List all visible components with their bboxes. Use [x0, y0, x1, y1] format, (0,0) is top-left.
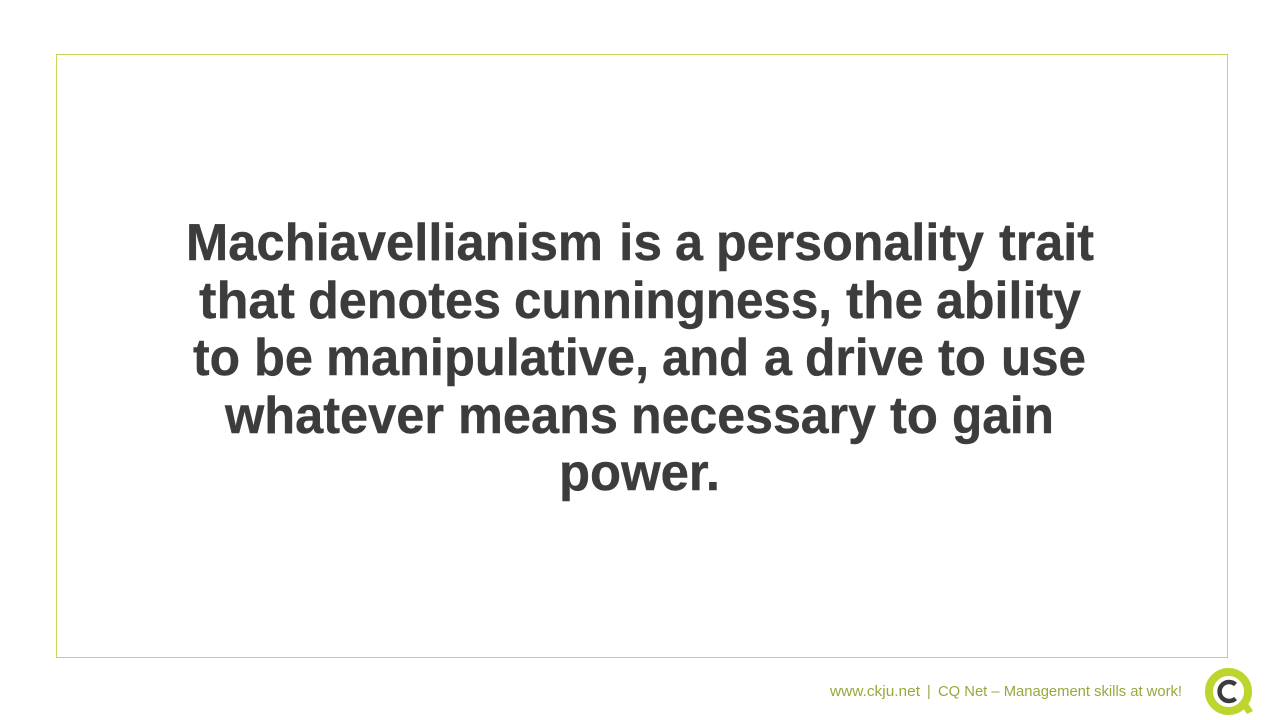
heading: definition quote: and: [662, 329, 749, 387]
heading: definition quote: that: [199, 272, 295, 330]
footer text: www.ckju.net: [829, 684, 920, 700]
heading: definition quote: to: [938, 329, 986, 387]
heading: definition quote: cunningness,: [514, 272, 832, 330]
heading: definition quote: [186, 214, 1094, 502]
heading: definition quote: a: [764, 329, 793, 387]
heading: definition quote: personality: [716, 214, 984, 272]
heading: definition quote: be: [254, 329, 313, 387]
heading: definition quote: whatever: [224, 387, 444, 445]
heading: definition quote: Machiavellianism: [186, 214, 603, 272]
heading: definition quote: drive: [805, 329, 924, 387]
heading: definition quote: manipulative,: [326, 329, 649, 387]
heading: definition quote: use: [1001, 329, 1086, 387]
footer text: |: [927, 684, 931, 700]
heading: definition quote: the: [846, 272, 923, 330]
heading: definition quote: is: [619, 214, 662, 272]
heading: definition quote: power.: [559, 444, 720, 502]
footer text: CQ Net – Management skills at work!: [938, 684, 1182, 700]
heading: definition quote: means: [458, 387, 618, 445]
footer text: [829, 684, 1182, 700]
heading: definition quote: to: [193, 329, 240, 387]
heading: definition quote: a: [675, 214, 704, 272]
icon: CQ logo: [1209, 672, 1253, 714]
heading: definition quote: trait: [999, 214, 1094, 272]
heading: definition quote: ability: [936, 272, 1081, 330]
heading: definition quote: to: [890, 387, 938, 445]
heading: definition quote: gain: [952, 387, 1054, 445]
heading: definition quote: necessary: [631, 387, 876, 445]
heading: definition quote: denotes: [308, 272, 501, 330]
panel: frame: [56, 54, 1228, 658]
